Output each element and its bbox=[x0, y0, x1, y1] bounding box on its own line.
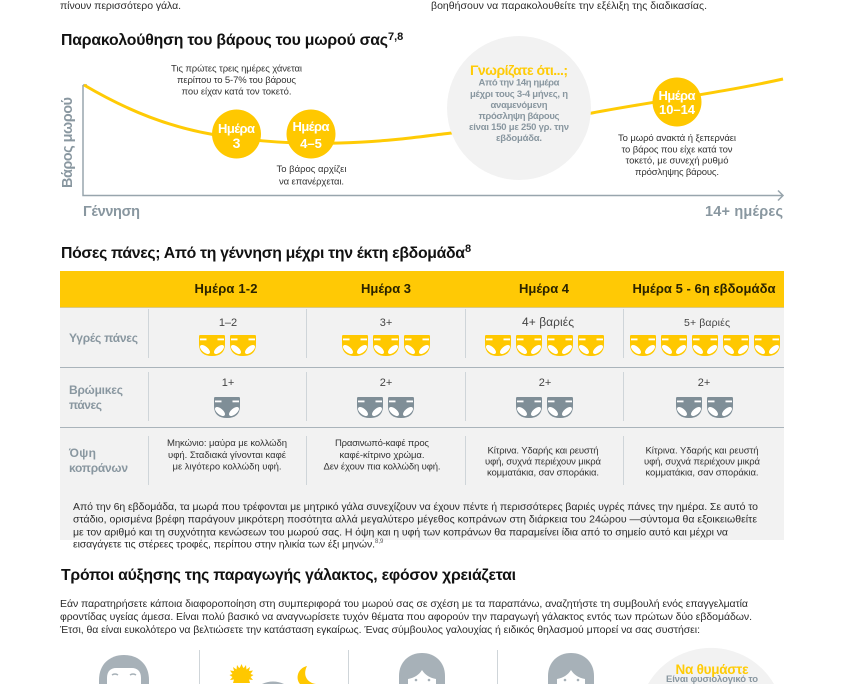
note: first three days bbox=[171, 64, 302, 98]
weight curve line bbox=[84, 79, 783, 143]
row: wet diapers: 5+ βαριές bbox=[684, 317, 730, 329]
callout: remember bbox=[648, 648, 774, 684]
intro text: right column ending: βοηθήσουν να παρακολουθείτε την εξέλιξη της διαδικασίας. bbox=[431, 0, 707, 12]
heading: baby weight tracking: 7,8 bbox=[388, 31, 403, 43]
row: wet diapers bbox=[69, 315, 781, 356]
note: first three days: που είχαν κατά τον τοκετό. bbox=[182, 86, 292, 98]
row: wet diapers: 1–2 bbox=[219, 317, 237, 329]
table header: Ημέρα 4 bbox=[519, 281, 570, 296]
row: stool appearance: Κίτρινα. Υδαρής και ρευστή bbox=[488, 446, 598, 456]
note: baby regains weight: το βάρος που είχε κατά τον bbox=[622, 144, 733, 156]
row: dirty diapers: 2+ bbox=[539, 377, 551, 389]
row: stool appearance: κομματάκια, σαν σποράκια. bbox=[487, 468, 599, 478]
row: dirty diapers: πάνες bbox=[69, 398, 102, 412]
text block: milk production advice bbox=[59, 598, 752, 636]
row: dirty diapers: 2+ bbox=[698, 377, 710, 389]
note: baby regains weight: τοκετό, με συνεχή ρυθμό bbox=[626, 156, 728, 166]
heading: baby weight tracking: Παρακολούθηση του βάρους του μωρού σας bbox=[61, 32, 388, 49]
table header: Ημέρα 3 bbox=[361, 281, 411, 296]
callout: did you know: αναμενόμενη bbox=[490, 100, 548, 111]
text block: milk production advice: Εάν παρατηρήσετε κάποια διαφοροποίηση στη συμπεριφορά του μωρού σας σε σχέση με τα παραπάνω, αναζητήστε τη συμβουλή ενός επαγγελματία bbox=[60, 598, 748, 610]
marker: day 4-5: Ημέρα bbox=[292, 119, 330, 134]
icon: mother bbox=[399, 653, 445, 684]
x axis start label: Γέννηση bbox=[83, 204, 140, 220]
table header: Ημέρα 1-2 bbox=[194, 281, 258, 296]
x axis end label: 14+ ημέρες bbox=[705, 204, 783, 220]
callout: did you know: Γνωρίζατε ότι...; bbox=[470, 62, 568, 78]
row: wet diapers: 3+ bbox=[380, 317, 392, 329]
marker: day 10-14 bbox=[652, 78, 702, 126]
row: dirty diapers bbox=[69, 377, 734, 418]
marker: day 10-14: Ημέρα bbox=[658, 88, 696, 103]
text block: milk production advice: φροντίδας υγείας άμεσα. Είναι πολύ βασικό να αναγνωρίσετε τυχόν θέματα που αφορούν την παραγωγή γάλακτος εντός των πρώτων δύο εβδομάδων. bbox=[60, 611, 752, 623]
text block: after the sixth week bbox=[73, 501, 758, 550]
note: baby regains weight bbox=[618, 133, 736, 178]
table: diapers by day bbox=[60, 271, 784, 540]
marker: day 3: Ημέρα bbox=[218, 121, 255, 136]
row: stool appearance: υφή, συχνά περιέχουν μικρά bbox=[485, 456, 602, 468]
note: weight begins to return: Το βάρος αρχίζει bbox=[276, 164, 346, 175]
icon: mother bbox=[548, 653, 594, 684]
callout: did you know: μέχρι τους 3-4 μήνες, η bbox=[470, 89, 568, 100]
note: baby regains weight: πρόσληψης βάρους. bbox=[635, 167, 719, 178]
row: stool appearance: Όψη bbox=[68, 446, 96, 460]
note: weight begins to return bbox=[276, 164, 346, 188]
callout: remember: Να θυμάστε bbox=[676, 662, 749, 677]
callout: did you know: πρόσληψη βάρους bbox=[478, 111, 560, 122]
callout: did you know: εβδομάδα. bbox=[496, 133, 542, 144]
note: first three days: Τις πρώτες τρεις ημέρες χάνεται bbox=[171, 64, 302, 74]
heading: how many diapers: 8 bbox=[465, 243, 471, 255]
text block: after the sixth week: 8,9 bbox=[375, 539, 384, 545]
text block: after the sixth week: εισαγάγετε τις στέρεες τροφές, περίπου στην ηλικία των έξι μηνών. bbox=[73, 538, 375, 550]
row: stool appearance: Κίτρινα. Υδαρής και ρευστή bbox=[646, 446, 758, 456]
text block: after the sixth week: Από την 6η εβδομάδα, τα μωρά που τρέφονται με μητρικό γάλα συνεχίζουν να έχουν πέντε ή περισσότερες βαριές υγρές πάνες την ημέρα. Σε αυτό το bbox=[73, 501, 758, 513]
row: dirty diapers: 1+ bbox=[222, 377, 234, 389]
callout: did you know: είναι 150 με 250 γρ. την bbox=[469, 122, 569, 133]
row: stool appearance: Πρασινωπό-καφέ προς bbox=[335, 438, 429, 449]
row: stool appearance: με λιγότερο κολλώδη υφή. bbox=[172, 462, 282, 472]
table header: Ημέρα 5 - 6η εβδομάδα bbox=[632, 281, 776, 296]
marker: day 4-5: 4–5 bbox=[300, 136, 322, 151]
callout: did you know: Από την 14η ημέρα bbox=[478, 78, 560, 88]
chart: baby weight curve bbox=[60, 36, 783, 220]
row: wet diapers: Υγρές πάνες bbox=[69, 331, 138, 345]
chart axes bbox=[83, 85, 783, 200]
note: baby regains weight: Το μωρό ανακτά ή ξεπερνάει bbox=[618, 133, 736, 144]
row: stool appearance bbox=[68, 438, 760, 478]
row: dirty diapers: Βρώμικες bbox=[69, 383, 123, 397]
note: weight begins to return: να επανέρχεται. bbox=[279, 176, 344, 188]
marker: day 3 bbox=[212, 110, 261, 158]
row: stool appearance: καφέ-κίτρινο χρώμα. bbox=[340, 450, 424, 461]
note: first three days: περίπου το 5-7% του βάρους bbox=[177, 75, 296, 86]
heading: how many diapers: Πόσες πάνες; Από τη γέννηση μέχρι την έκτη εβδομάδα bbox=[61, 245, 465, 262]
row: dirty diapers: 2+ bbox=[380, 377, 392, 389]
callout: did you know bbox=[447, 36, 591, 180]
row: wet diapers: 4+ βαριές bbox=[522, 315, 574, 329]
marker: day 3: 3 bbox=[233, 135, 241, 151]
table header bbox=[60, 271, 784, 307]
icons: yellow diapers bbox=[198, 335, 781, 356]
icons: grey diapers bbox=[213, 397, 734, 418]
text block: milk production advice: Έτσι, θα είναι ευκολότερο να βελτιώσετε την κατάσταση εγκαίρως. Ένας σύμβουλος γαλουχίας ή ειδικός θηλασμού μπορεί να σας συστήσει: bbox=[59, 624, 700, 636]
y axis label: Βάρος μωρού bbox=[60, 97, 76, 188]
marker: day 10-14: 10–14 bbox=[659, 102, 696, 117]
text block: after the sixth week: στάδιο, ορισμένα βρέφη παράγουν μικρότερη ποσότητα αλλά μεγαλύτερο μέγεθος κοπράνων στη διάρκεια του 24ώρου —σύντομα θα εξοικειωθείτε bbox=[73, 514, 757, 526]
marker: day 4-5 bbox=[286, 110, 336, 158]
table body background bbox=[60, 307, 784, 540]
icon: sun, moon and baby bbox=[230, 664, 316, 684]
row: stool appearance: Δεν έχουν πια κολλώδη υφή. bbox=[324, 462, 440, 472]
row: stool appearance: κοπράνων bbox=[69, 461, 128, 475]
intro text: left column ending: πίνουν περισσότερο γάλα. bbox=[60, 0, 181, 12]
icon: sleeping mother bbox=[99, 655, 149, 684]
row: stool appearance: υφή, συχνά περιέχουν μικρά bbox=[644, 456, 760, 468]
row: stool appearance: υφή. Σταδιακά γίνονται καφέ bbox=[168, 450, 287, 461]
row: stool appearance: κομματάκια, σαν σποράκια. bbox=[646, 468, 758, 478]
row: stool appearance: Μηκώνιο: μαύρα με κολλώδη bbox=[167, 438, 287, 449]
text block: after the sixth week: με τον αριθμό και τη συχνότητα κενώσεων του μωρού σας. Η όψη και η υφή των κοπράνων θα παραμείνει ίδια από το σημείο αυτό και μέχρι να bbox=[73, 526, 728, 538]
heading: ways to increase milk production: Τρόποι αύξησης της παραγωγής γάλακτος, εφόσον χρειάζεται bbox=[61, 567, 516, 584]
